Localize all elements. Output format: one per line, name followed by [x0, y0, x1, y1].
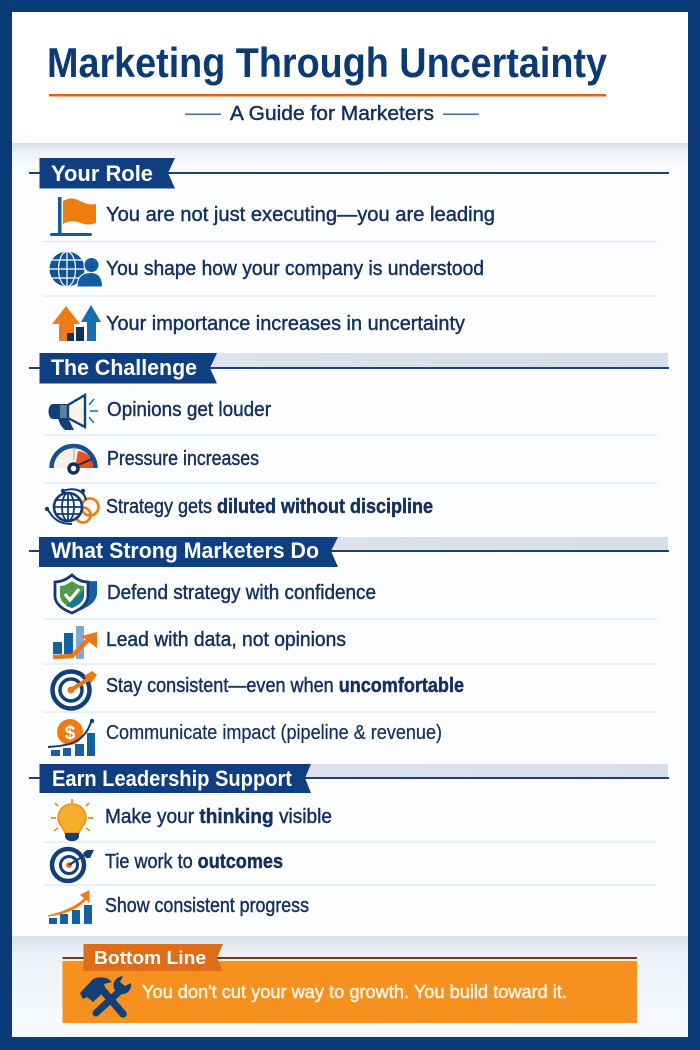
heading: Your Role: Your Role	[51, 161, 153, 186]
heading: What Strong Marketers Do: What Strong Marketers Do	[51, 538, 319, 563]
text: Your importance increases in uncertainty	[106, 312, 466, 335]
icon: hammer and wrench	[80, 976, 131, 1014]
icon: tangled network	[45, 489, 98, 524]
heading: Your Role	[29, 158, 669, 188]
icon: globe and person	[50, 252, 102, 287]
item: outcomes	[43, 849, 657, 886]
heading: Earn Leadership Support	[29, 764, 669, 793]
icon: dollar with bars	[48, 719, 95, 756]
section: What Strong Marketers Do	[29, 537, 669, 756]
text: Strategy gets diluted without discipline	[106, 495, 433, 518]
item: progress	[48, 891, 309, 924]
text: Tie work to outcomes	[105, 850, 283, 873]
heading: The Challenge	[29, 353, 669, 384]
section: The Challenge	[29, 353, 669, 524]
icon: target with orange arrow	[52, 671, 97, 708]
text: Stay consistent—even when uncomfortable	[106, 674, 464, 697]
item: pressure	[43, 446, 657, 484]
item: defend	[43, 575, 657, 620]
item: data	[43, 626, 657, 665]
item: consistent	[43, 671, 657, 713]
icon: growth chart	[48, 891, 92, 924]
icon: target with navy arrow	[52, 849, 94, 881]
bottom line tab: Bottom Line	[94, 947, 206, 968]
icon: megaphone	[48, 395, 98, 430]
footer band	[12, 936, 688, 1037]
section: Earn Leadership Support	[29, 764, 669, 924]
title underline	[49, 94, 606, 96]
item: opinions	[43, 395, 657, 436]
icon: dollar with bars: $	[65, 723, 76, 744]
heading: The Challenge: The Challenge	[51, 355, 197, 380]
text: Show consistent progress	[105, 894, 309, 917]
message: You don't cut your way to growth. You build toward it.	[142, 982, 567, 1002]
panel: bottom line	[62, 944, 637, 1023]
bottom line tab	[84, 944, 223, 971]
section: Your Role	[29, 158, 669, 341]
subtitle: A Guide for Marketers	[230, 102, 434, 125]
text: Pressure increases	[107, 447, 259, 470]
item: thinking	[43, 799, 657, 843]
text: Communicate impact (pipeline & revenue)	[106, 721, 442, 744]
icon: gauge	[52, 446, 96, 473]
header	[12, 12, 688, 169]
icon: up arrows	[52, 305, 101, 341]
text: You shape how your company is understood	[106, 257, 484, 280]
item: understood	[43, 252, 657, 297]
heading: Earn Leadership Support: Earn Leadership Support	[52, 766, 293, 791]
item: impact	[48, 719, 442, 756]
text: You are not just executing—you are leading	[106, 203, 495, 226]
heading: What Strong Marketers Do	[29, 537, 669, 567]
icon: shield	[55, 575, 97, 613]
icon: flag	[50, 197, 96, 236]
icon: light bulb	[51, 799, 93, 841]
item: importance	[52, 305, 466, 341]
text: Defend strategy with confidence	[107, 581, 376, 604]
text: Lead with data, not opinions	[106, 628, 346, 651]
item: leading	[43, 197, 657, 242]
item: strategy	[45, 489, 433, 524]
text: Make your thinking visible	[105, 805, 332, 828]
text: Opinions get louder	[107, 398, 271, 421]
title: Marketing Through Uncertainty	[47, 39, 608, 86]
icon: bars with arrow	[53, 626, 97, 659]
